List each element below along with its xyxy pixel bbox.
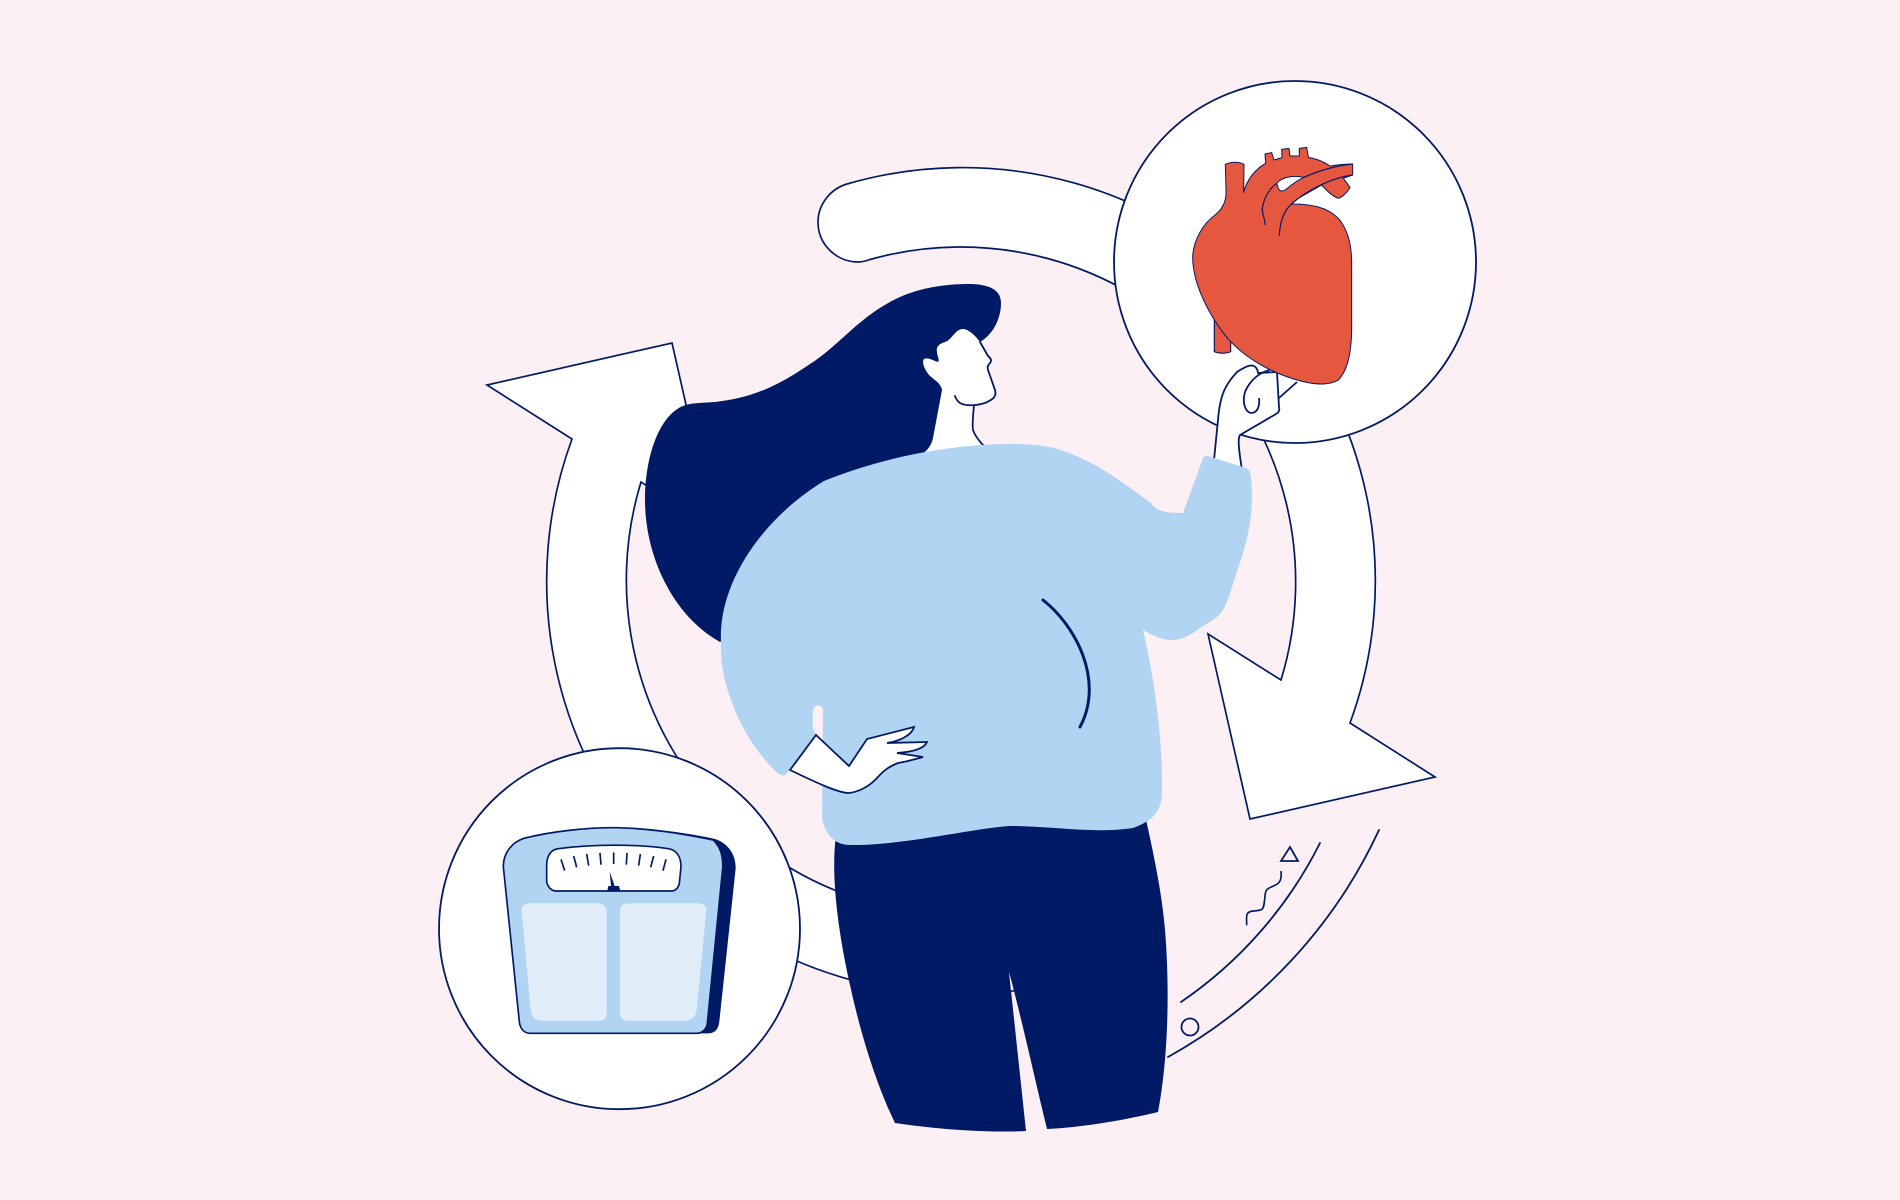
face and neck [920, 329, 996, 456]
hair [645, 284, 1001, 642]
raised hand [1212, 365, 1297, 480]
icon: weight scale [503, 827, 736, 1033]
hand on hip [790, 727, 927, 793]
sweater [721, 444, 1252, 845]
icon: heart [1193, 147, 1353, 384]
panel: heart circle [1114, 81, 1476, 443]
motion lines and small shapes [1168, 830, 1379, 1057]
arrow: bottom to left [487, 343, 1104, 994]
arrow: top to right [818, 168, 1435, 819]
trousers [834, 815, 1168, 1132]
panel: weight scale circle [439, 748, 800, 1109]
sweater crease [1043, 600, 1089, 727]
